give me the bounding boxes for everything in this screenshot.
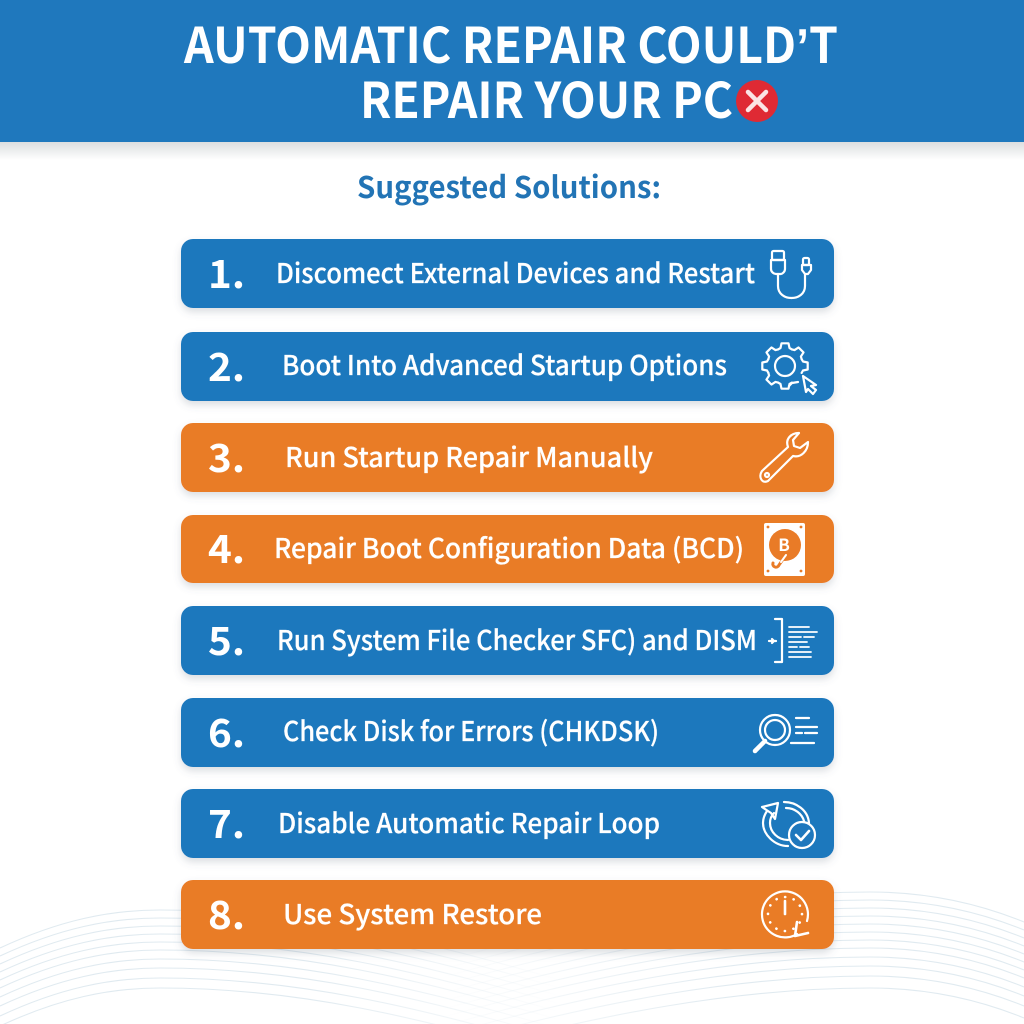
title — [183, 7, 838, 133]
icon: red error X — [736, 80, 778, 122]
step 1 — [181, 239, 834, 308]
step 4: 4. — [208, 519, 245, 575]
step 2: Boot Into Advanced Startup Options — [282, 344, 727, 383]
step 6 — [181, 698, 834, 767]
icon: usb cable — [771, 251, 811, 298]
title: AUTOMATIC REPAIR COULD’T — [183, 7, 838, 78]
icon: wrench — [760, 433, 808, 482]
icon: hard drive: B — [778, 531, 790, 556]
step 7: 7. — [208, 794, 245, 850]
icon: magnifier with lines — [755, 715, 817, 751]
step 6: Check Disk for Errors (CHKDSK) — [283, 710, 659, 749]
step 7 — [181, 789, 834, 858]
step 3 — [181, 423, 834, 492]
icon: refresh with check — [762, 802, 815, 848]
step 2 — [181, 332, 834, 401]
step 2: 2. — [208, 337, 245, 393]
step 8: Use System Restore — [283, 893, 542, 932]
step 7: Disable Automatic Repair Loop — [278, 802, 660, 841]
title: REPAIR YOUR PC — [360, 62, 733, 133]
step 1: 1. — [208, 244, 245, 300]
icon: hard drive — [764, 523, 805, 576]
step 5: Run System File Checker SFC) and DISM — [277, 619, 757, 658]
step 5: 5. — [208, 611, 245, 667]
icon: clock restore — [762, 891, 808, 937]
step 4 — [181, 515, 834, 583]
header banner — [0, 0, 1024, 160]
step 6: 6. — [208, 703, 245, 759]
icon: file scan list — [769, 619, 817, 662]
step 5 — [181, 606, 834, 675]
icon: gear with cursor — [762, 343, 816, 394]
step 3: Run Startup Repair Manually — [285, 436, 653, 475]
heading: suggested solutions: Suggested Solutions: — [357, 163, 661, 207]
step 8: 8. — [208, 885, 245, 941]
step 4: Repair Boot Configuration Data (BCD) — [274, 527, 744, 566]
step 3: 3. — [208, 428, 245, 484]
step 1: Discomect External Devices and Restart — [276, 252, 755, 291]
step 8 — [181, 880, 834, 949]
